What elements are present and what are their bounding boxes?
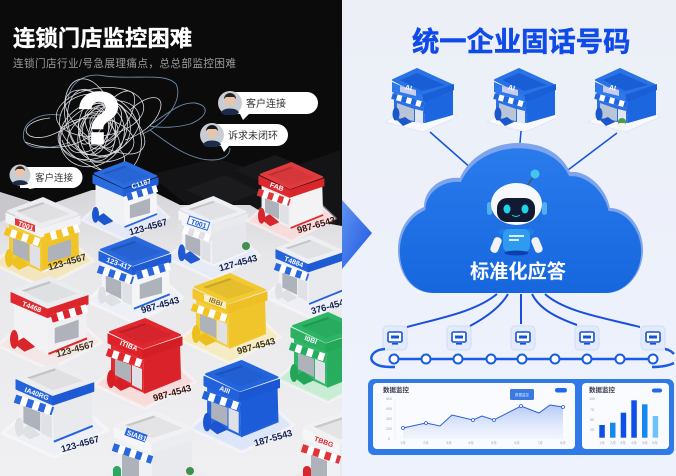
chart: bar chart: 数据监控	[589, 385, 616, 394]
chart: bar chart: 1月	[599, 440, 605, 445]
shop: white blue band right: 376-4543	[310, 296, 350, 316]
chart: line chart: 数据监控	[515, 392, 529, 397]
shop: AI store 1: AI	[404, 84, 413, 93]
shop: white with blue sign	[167, 197, 260, 280]
cloud	[398, 143, 643, 293]
chart: line chart: 300	[386, 417, 392, 421]
shop: green	[278, 313, 378, 402]
chart: line chart: 1月	[400, 440, 406, 445]
title: right: 统一企业固话号码	[412, 26, 630, 57]
chart: bar chart: 4月	[631, 440, 637, 445]
panel: right unified phone number	[342, 0, 676, 476]
shop: blue second row: 123-417	[105, 257, 132, 272]
shop: red: ITIBA	[119, 340, 138, 353]
shop: yellow: 987-4543	[236, 336, 276, 356]
chart: line chart: 5月	[491, 440, 497, 445]
shop: AI store 3	[588, 69, 660, 132]
chart: line chart: 0	[388, 437, 390, 441]
shop: white bottom	[106, 411, 208, 476]
subtitle: left: 连锁门店行业/号急展理痛点，总总部监控困难	[13, 57, 236, 70]
shop: red: 987-4543	[152, 383, 192, 403]
shop: white blue band lower: IA40RG	[23, 387, 50, 402]
chart: bar chart: 2月	[610, 440, 616, 445]
connector lines: cloud to terminals	[407, 294, 640, 327]
shop: white red band: 123-4567	[55, 339, 95, 359]
icon: tangled lines	[23, 73, 230, 183]
shop: blue top row: 123-4567	[128, 217, 168, 237]
callout: unresolved request: 诉求未闭环	[228, 129, 278, 142]
title: left: 连锁门店监控困难	[13, 26, 192, 51]
connector lines: stores to cloud	[430, 131, 617, 170]
callout: customer connect top	[218, 91, 318, 120]
chart: bar chart: 50	[590, 418, 594, 422]
callout: customer connect left: 客户连接	[35, 172, 74, 184]
callout: unresolved request	[200, 123, 288, 152]
chart: line chart: 4月	[468, 440, 474, 445]
shop: blue top row	[81, 162, 169, 240]
chart: line chart: 7月	[537, 440, 543, 445]
shop: AI store 3: AI	[608, 84, 617, 93]
chart: bar chart: 75	[590, 408, 594, 412]
shop: white red band	[0, 277, 102, 370]
shop: blue lower	[191, 361, 293, 452]
shop: white roof yellow awning: 123-4567	[47, 252, 87, 272]
shop: AI store 2	[487, 69, 559, 132]
shop: red	[95, 319, 195, 408]
panel: dashboard	[368, 379, 674, 455]
shop: red top row: FAB	[269, 182, 284, 193]
shop: white with blue sign: T001	[190, 219, 207, 230]
shop: white red band: T4468	[21, 301, 42, 314]
chain of network nodes	[371, 349, 674, 367]
shop: blue second row: 987-4543	[140, 295, 180, 315]
shop: blue lower: AIII	[218, 385, 231, 396]
shop: white roof yellow awning: T001	[17, 221, 34, 233]
chart: line chart: 8月	[560, 440, 566, 445]
chart: line chart: 2月	[423, 440, 429, 445]
chart: bar chart: 6月	[652, 440, 658, 445]
shop: white bottom: SIAB1	[126, 430, 147, 443]
shop: white blue band lower: 123-4567	[60, 434, 100, 454]
chart: bar chart	[582, 383, 669, 449]
chart: bar chart: 5月	[642, 440, 648, 445]
shop: red top row	[247, 163, 336, 241]
chart: line chart: 3月	[446, 440, 452, 445]
chart: line chart: 500	[386, 397, 392, 401]
shop: AI store 1	[385, 69, 457, 132]
chart: bar chart: 3月	[620, 440, 626, 445]
arrow: transition left to right	[342, 200, 372, 269]
shop: white blue band lower	[2, 364, 107, 457]
shop: blue top row: C1187	[131, 178, 152, 191]
shop: white blue band right: T4884	[283, 256, 304, 269]
shop: green: I0BI	[303, 335, 318, 346]
callout: customer connect left	[10, 164, 82, 189]
shop: blue lower: 187-5543	[253, 428, 293, 448]
chart: bar chart: 100	[589, 397, 595, 401]
shop: white roof yellow awning	[0, 198, 93, 287]
callout: customer connect top: 客户连接	[246, 97, 286, 110]
chart: line chart: 400	[386, 407, 392, 411]
shop: AI store 2: AI	[507, 84, 516, 93]
shop: yellow	[180, 274, 280, 363]
shop: red top row: 987-6543	[296, 215, 336, 235]
chart: line chart: 6月	[514, 440, 520, 445]
robot	[487, 170, 547, 256]
chart: line chart: 数据监控	[383, 385, 410, 394]
terminal icons	[383, 326, 665, 350]
shop: white with blue sign: 127-4543	[218, 253, 258, 273]
shop: white red bottom right: TBBG	[313, 436, 335, 449]
shop: white blue band right	[264, 236, 356, 318]
shop: yellow: IBBI	[208, 297, 223, 308]
shop: white red bottom right	[295, 413, 381, 476]
shop: blue second row	[86, 237, 183, 323]
chart: bar chart: 25	[590, 428, 594, 432]
chart: line chart	[373, 383, 575, 449]
chart: line chart: 200	[386, 427, 392, 431]
panel: left chain store problem	[0, 0, 381, 476]
label: standard answers: 标准化应答	[470, 260, 566, 283]
icon: question mark: ?	[77, 79, 121, 159]
